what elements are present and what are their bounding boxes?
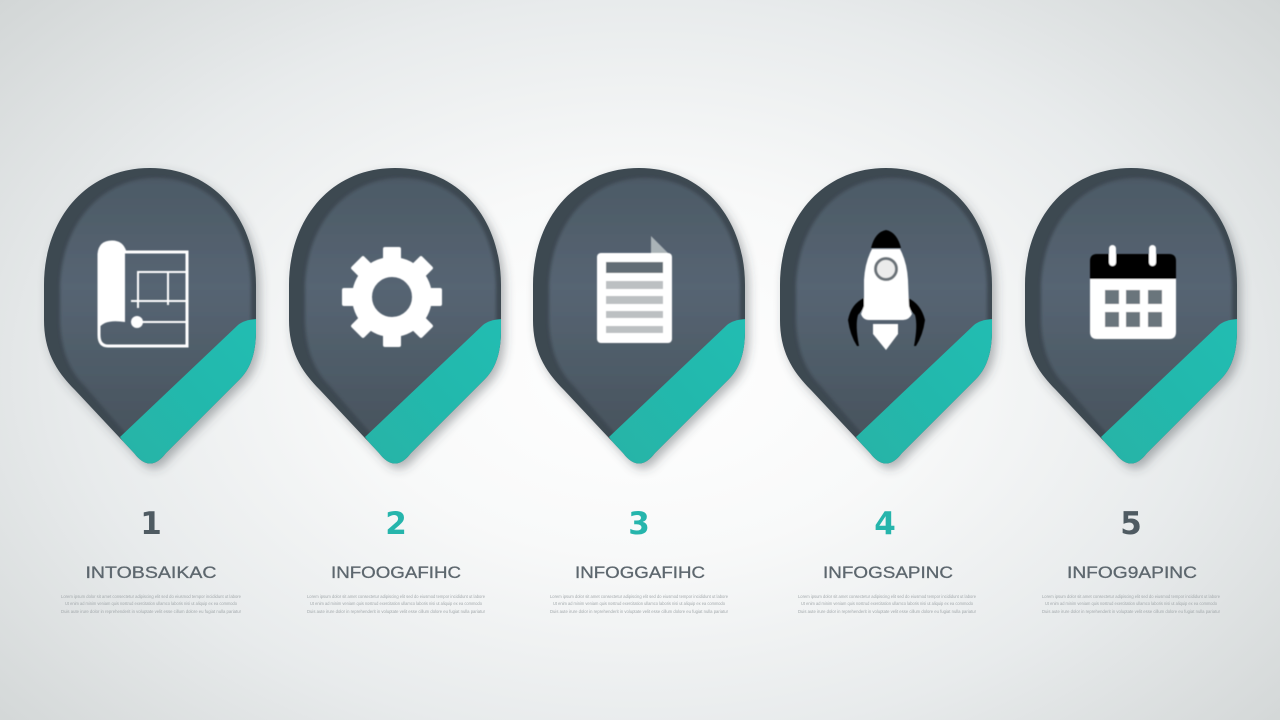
description 4: Lorem ipsum dolor sit amet consectetur adipiscing elit sed do eiusmod tempor incididunt ut labore: [798, 594, 976, 599]
description 3: Lorem ipsum dolor sit amet consectetur adipiscing elit sed do eiusmod tempor incididunt ut labore: [550, 594, 728, 599]
description 5: [1042, 594, 1220, 614]
label 5: INFOG9APINC: [1067, 563, 1197, 582]
description 2: [307, 594, 485, 614]
description 5: Ut enim ad minim veniam quis nostrud exercitation ullamco laboris nisi ut aliquip ex ea commodo: [1045, 601, 1217, 606]
description 2: Duis aute irure dolor in reprehenderit in voluptate velit esse cillum dolore eu fugiat nulla pariatur: [307, 609, 485, 614]
icon: rocket: [848, 230, 925, 350]
step 1: [44, 168, 260, 614]
description 1: Duis aute irure dolor in reprehenderit in voluptate velit esse cillum dolore eu fugiat nulla pariatur: [61, 609, 241, 614]
number 5: 5: [1120, 506, 1142, 542]
pin 1: [44, 168, 260, 480]
description 3: [550, 594, 728, 614]
description 4: Ut enim ad minim veniam quis nostrud exercitation ullamco laboris nisi ut aliquip ex ea commodo: [801, 601, 973, 606]
description 3: Ut enim ad minim veniam quis nostrud exercitation ullamco laboris nisi ut aliquip ex ea commodo: [553, 601, 725, 606]
pin 4: [780, 168, 996, 480]
step 3: [533, 168, 749, 614]
label 1: INTOBSAIKAC: [86, 563, 216, 582]
pin 3: [533, 168, 749, 480]
icon: blueprint: [98, 241, 187, 346]
description 4: [798, 594, 976, 614]
icon: document: [597, 236, 672, 343]
description 2: Lorem ipsum dolor sit amet consectetur adipiscing elit sed do eiusmod tempor incididunt ut labore: [307, 594, 485, 599]
number 1: 1: [140, 506, 162, 542]
label 3: INFOGGAFIHC: [575, 563, 705, 582]
icon: calendar: [1090, 245, 1176, 339]
pin 5: [1025, 168, 1241, 480]
number 3: 3: [628, 506, 650, 542]
number 4: 4: [874, 506, 896, 542]
description 5: Lorem ipsum dolor sit amet consectetur adipiscing elit sed do eiusmod tempor incididunt ut labore: [1042, 594, 1220, 599]
label 2: INFOOGAFIHC: [331, 563, 461, 582]
icon: gear: [342, 247, 442, 347]
step 5: [1025, 168, 1241, 614]
number 2: 2: [385, 506, 407, 542]
description 1: [61, 594, 241, 614]
step 2: [289, 168, 505, 614]
pin 2: [289, 168, 505, 480]
description 1: Lorem ipsum dolor sit amet consectetur adipiscing elit sed do eiusmod tempor incididunt ut labore: [61, 594, 241, 599]
description 1: Ut enim ad minim veniam quis nostrud exercitation ullamco laboris nisi ut aliquip ex ea commodo: [65, 601, 237, 606]
label 4: INFOGSAPINC: [823, 563, 953, 582]
step 4: [780, 168, 996, 614]
description 2: Ut enim ad minim veniam quis nostrud exercitation ullamco laboris nisi ut aliquip ex ea commodo: [310, 601, 482, 606]
description 3: Duis aute irure dolor in reprehenderit in voluptate velit esse cillum dolore eu fugiat nulla pariatur: [550, 609, 728, 614]
description 4: Duis aute irure dolor in reprehenderit in voluptate velit esse cillum dolore eu fugiat nulla pariatur: [798, 609, 976, 614]
description 5: Duis aute irure dolor in reprehenderit in voluptate velit esse cillum dolore eu fugiat nulla pariatur: [1042, 609, 1220, 614]
